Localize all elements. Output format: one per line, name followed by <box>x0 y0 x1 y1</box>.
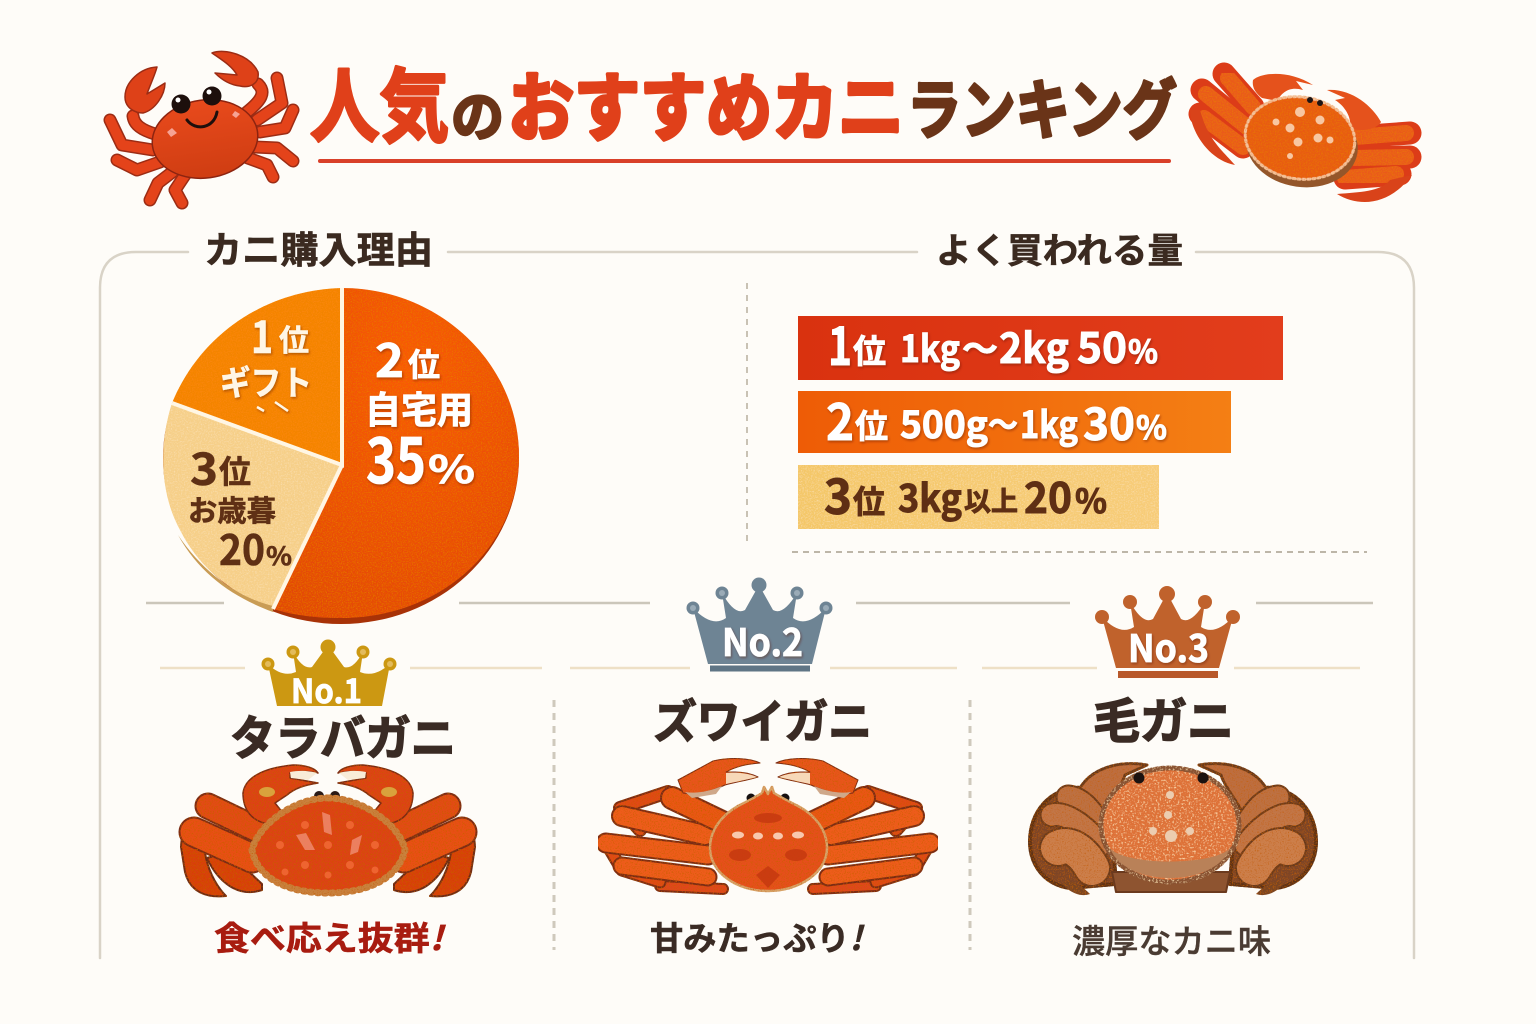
label: rank 1: 1 <box>251 302 273 366</box>
label: rank 2: 35 <box>366 411 426 501</box>
name: tarabagani: タラバガニ <box>230 700 456 769</box>
illustration: zuwaigani crab <box>606 759 930 891</box>
bar: rank 1 <box>798 305 1283 380</box>
slice: year-end gift <box>163 403 342 609</box>
caption: tarabagani: 食べ応え抜群 ! <box>214 912 446 960</box>
bar: rank 3: 3 <box>824 458 852 528</box>
bar: rank 1: 1 <box>828 305 852 380</box>
label: rank 1: ギフト <box>220 356 312 405</box>
illustration: tarabagani crab <box>181 765 475 896</box>
bar: rank 1: 位 <box>853 325 886 373</box>
bar: rank 3: 3kg <box>898 468 962 523</box>
bar: rank 2: % <box>1136 403 1167 449</box>
frame <box>100 252 1414 958</box>
dividers <box>146 283 1373 950</box>
label: rank 2: 自宅用 <box>365 380 473 434</box>
label: rank 2: % <box>428 439 475 494</box>
name: kegani: 毛ガニ <box>1093 682 1234 752</box>
slice: home use <box>273 288 519 618</box>
crown: No.3 <box>1095 586 1240 678</box>
caption: kegani: 濃厚なカニ味 <box>1072 915 1271 963</box>
label: rank 3 <box>188 434 292 578</box>
heading: popular amounts: よく買われる量 <box>936 223 1183 274</box>
bar: rank 2: 2 <box>826 383 854 455</box>
title: おすすめカニ <box>508 49 904 156</box>
label: rank 2: 位 <box>408 340 440 386</box>
illustration: kegani crab <box>1030 764 1316 895</box>
title underline <box>318 159 1171 163</box>
label: rank 2: 2 <box>375 325 404 391</box>
title: 人気 <box>310 43 449 159</box>
bar: rank 2: ～ <box>988 400 1018 446</box>
bar: rank 3: % <box>1075 475 1107 523</box>
bar: rank 1: 50 <box>1077 315 1127 376</box>
bar: rank 3 <box>798 458 1159 529</box>
bar: rank 1: % <box>1128 327 1158 373</box>
bar: rank 2: 1kg <box>1020 395 1078 449</box>
bar chart: amounts <box>798 305 1283 529</box>
label: rank 1 <box>220 302 312 411</box>
slice: gift <box>172 288 342 465</box>
bar: rank 1: ～ <box>962 322 998 371</box>
bar: rank 1: 1kg <box>900 319 960 373</box>
icon: cartoon crab mascot <box>110 51 293 203</box>
icon: top right crab <box>1190 74 1412 202</box>
label: rank 3: お歳暮 <box>188 488 276 530</box>
label: rank 2 <box>365 325 475 501</box>
bar: rank 2 <box>798 383 1231 455</box>
crown: No.2 <box>686 578 832 672</box>
bar: rank 3: 以上 <box>964 480 1018 519</box>
bar: rank 3: 20 <box>1024 465 1072 526</box>
label: rank 1: 位 <box>279 316 309 360</box>
label: rank 3: % <box>266 537 292 573</box>
pie chart: purchase reasons <box>163 288 519 624</box>
label: rank 3: 3 <box>190 434 218 498</box>
crown: No.2: No.2 <box>722 612 803 667</box>
title: ランキング <box>907 58 1177 152</box>
crown: No.1 <box>262 640 396 713</box>
bar: rank 2: 位 <box>855 400 888 448</box>
bar: rank 2: 500g <box>900 395 988 449</box>
bar: rank 3: 位 <box>853 477 885 523</box>
title: の <box>451 73 504 152</box>
label: rank 3: 20 <box>219 517 265 578</box>
label: rank 3: 位 <box>219 447 251 493</box>
caption: zuwaigani: 甘みたっぷり! <box>650 912 865 960</box>
crown: No.1: No.1 <box>291 665 362 713</box>
bar: rank 2: 30 <box>1083 389 1135 453</box>
bar: rank 1: 2kg <box>999 315 1069 375</box>
crown: No.3: No.3 <box>1128 618 1209 673</box>
heading: purchase reasons: カニ購入理由 <box>204 220 433 274</box>
name: zuwaigani: ズワイガニ <box>653 686 872 752</box>
title <box>310 43 1177 159</box>
